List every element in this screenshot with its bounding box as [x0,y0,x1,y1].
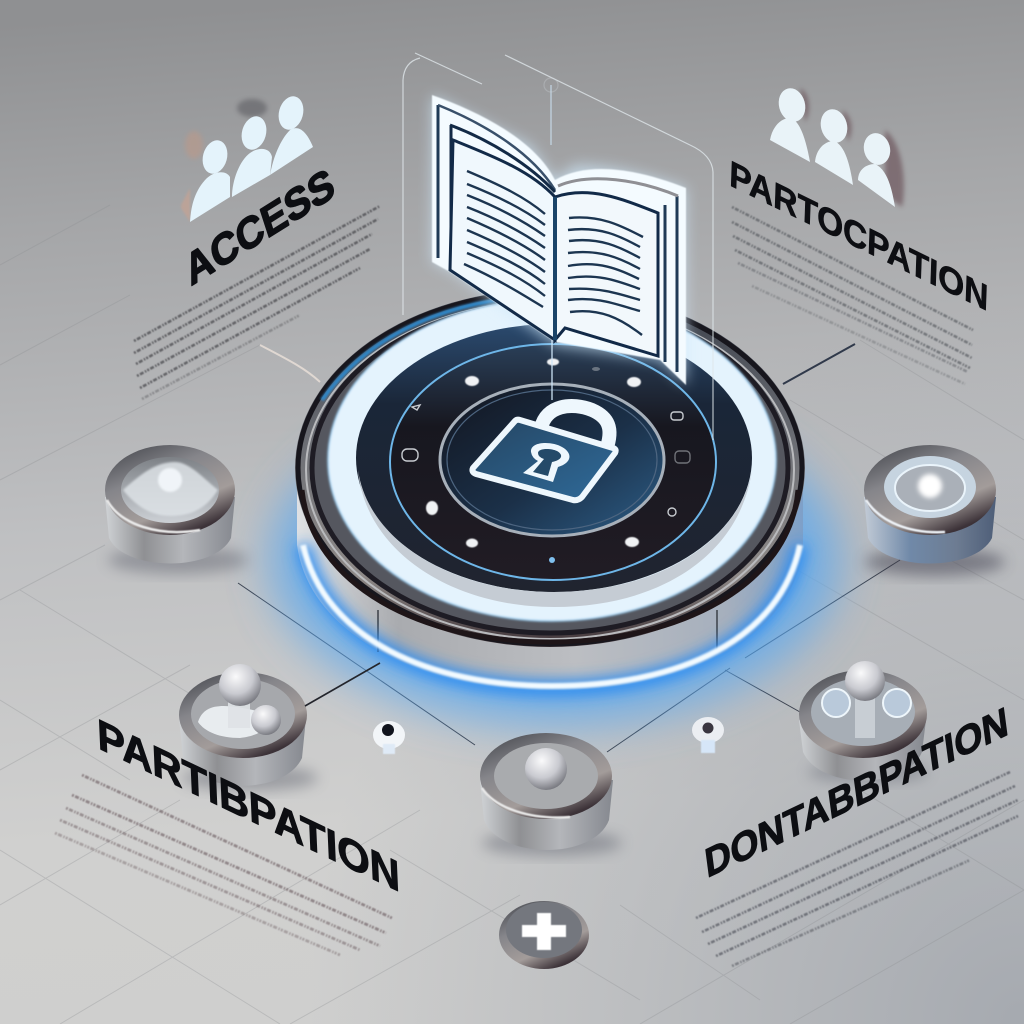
panel: donation [696,699,1018,966]
panel: participation top right [260,85,989,384]
pod: right [864,445,1005,576]
connector: left [260,345,320,382]
dial markers [402,358,690,563]
icon: people group [181,93,313,222]
connector: bottom left [305,663,380,706]
pod: bottom left [179,664,318,791]
outer rim [295,289,805,647]
heading: DONTABBPATION [702,699,1011,887]
heading: PARTOCPATION [729,154,989,320]
body text lines [696,772,1018,966]
glow [432,95,686,385]
dark dial [390,344,716,580]
glass panel [403,53,713,440]
icon: small node left [373,721,405,754]
heading: PARTIBPATION [96,709,401,902]
heading: ACCESS [179,158,340,295]
body text lines [134,206,380,399]
white glowing ring [328,299,776,621]
pod: left [105,445,248,574]
icon: open book [432,95,686,385]
pod: bottom center [480,733,622,856]
icon: plus button [499,901,589,969]
body text lines [732,207,973,384]
right page [555,193,658,356]
central platform [270,289,840,725]
icon: padlock [472,406,616,500]
platform side wall [297,470,803,690]
inner circle [440,384,664,536]
glowing base ring [303,545,800,688]
panel: access [134,93,380,399]
body text lines [55,775,392,955]
navy bowl [356,324,752,592]
blue glow under platform [270,395,840,725]
vertical beam [551,340,553,400]
connector: right [783,344,855,384]
left page [450,140,555,340]
panel: participation bottom left [55,709,401,955]
page lines [464,171,643,335]
back sheets [432,95,686,385]
icon: people group [770,85,904,207]
pod: bottom right [799,661,928,783]
icon: small node right [692,717,724,753]
